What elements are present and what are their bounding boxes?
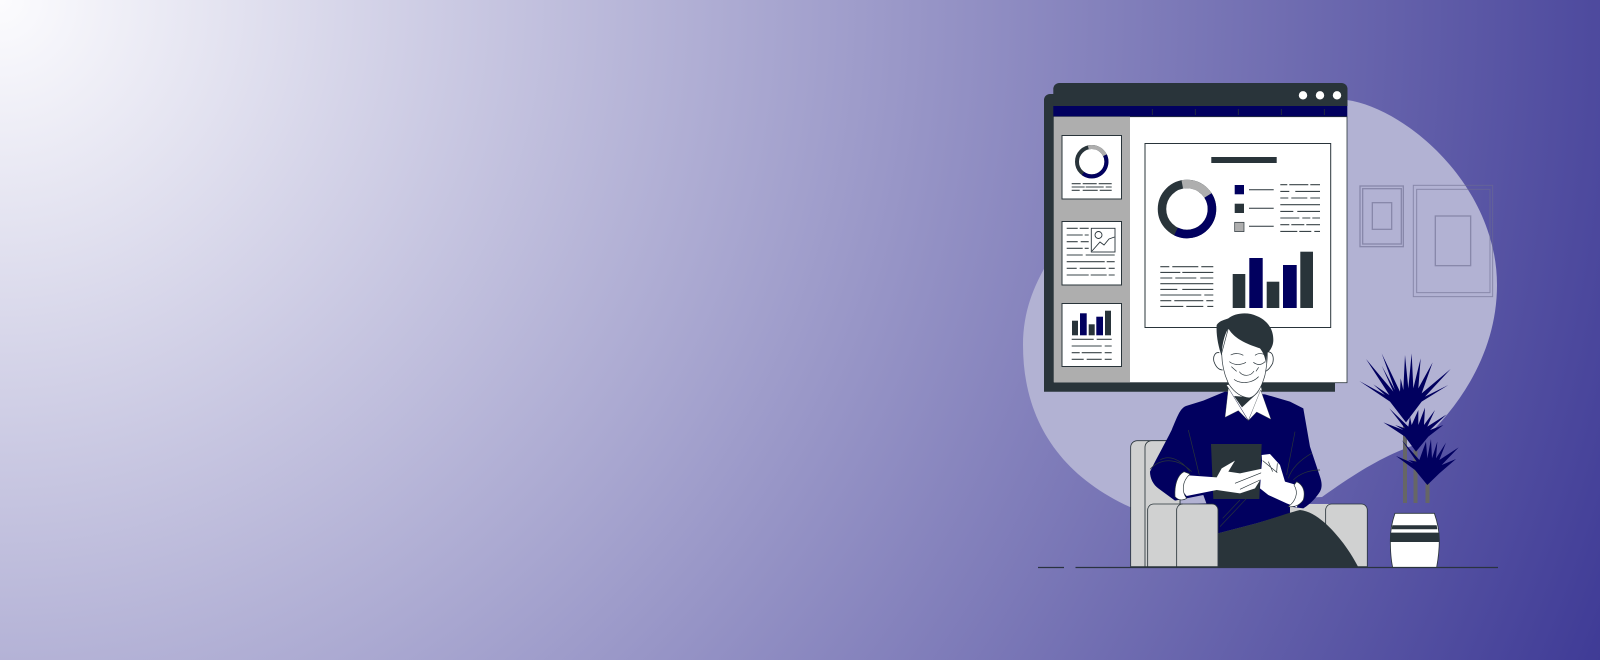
sidebar card: image and text <box>1062 222 1122 285</box>
sidebar card: bars <box>1062 304 1122 366</box>
window body <box>1054 117 1347 383</box>
shirt collar <box>1225 388 1271 421</box>
middle crown <box>1383 408 1447 452</box>
main report panel <box>1145 144 1331 328</box>
armchair back <box>1131 441 1367 567</box>
man head and neck <box>1214 313 1273 421</box>
right chair rear <box>1287 504 1330 567</box>
window back shadow <box>1044 94 1335 392</box>
large donut chart <box>1162 184 1212 234</box>
right hand detail <box>1263 461 1277 473</box>
facial features <box>1229 354 1265 383</box>
legend text lines <box>1280 185 1320 231</box>
left forearm and hand <box>1182 461 1264 496</box>
potted plant <box>1359 353 1459 567</box>
panel heading bar <box>1211 157 1277 163</box>
hair <box>1217 313 1273 363</box>
right forearm and hand <box>1260 454 1303 507</box>
stems <box>1403 425 1430 503</box>
trousers <box>1218 510 1358 567</box>
right arm <box>1326 504 1367 567</box>
armchair left arm <box>1148 504 1218 567</box>
wall frames <box>1360 185 1493 297</box>
man body <box>1150 392 1358 567</box>
right cuff <box>1288 482 1304 507</box>
sidebar <box>1054 117 1130 382</box>
sweater <box>1150 392 1322 533</box>
neck shadow <box>1234 390 1261 407</box>
title bar <box>1053 83 1348 106</box>
text block lines <box>1160 267 1213 306</box>
dashboard window <box>1044 83 1348 392</box>
large bar chart <box>1233 252 1313 308</box>
sweater creases <box>1150 430 1320 527</box>
man arms and tablet <box>1150 430 1320 527</box>
bottom crown <box>1396 439 1459 485</box>
left cuff <box>1175 472 1190 500</box>
left hand detail <box>1235 472 1264 489</box>
top crown <box>1359 353 1451 422</box>
window dots <box>1299 91 1341 100</box>
chair back <box>1131 441 1180 567</box>
sidebar card: donut <box>1062 136 1122 199</box>
face <box>1222 328 1267 398</box>
navy toolbar <box>1053 106 1347 117</box>
legend <box>1235 185 1274 232</box>
vase <box>1390 513 1439 567</box>
tablet <box>1211 444 1262 499</box>
ears <box>1214 352 1273 372</box>
ground line <box>1038 566 1498 568</box>
white neck <box>1227 382 1262 420</box>
background blob <box>1023 100 1497 507</box>
